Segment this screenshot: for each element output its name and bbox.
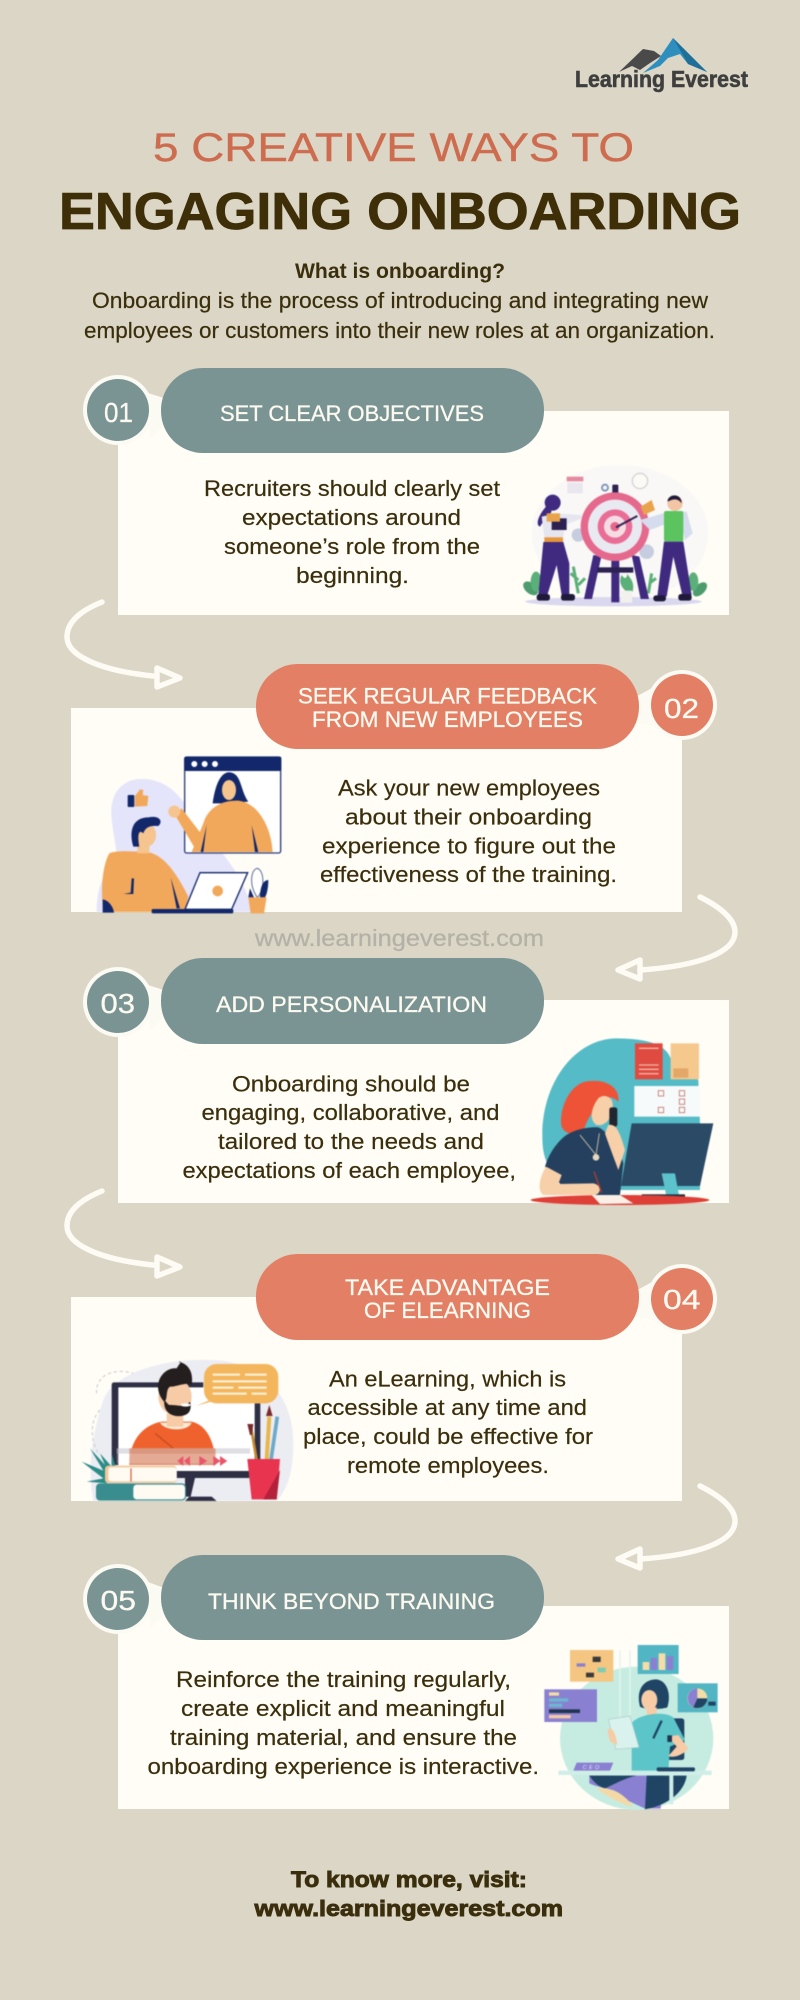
body text: Reinforce the training regularly, bbox=[176, 1667, 511, 1692]
heading pill bbox=[256, 1254, 639, 1340]
title bbox=[59, 126, 741, 241]
badge 05: 05 bbox=[100, 1585, 136, 1616]
heading pill: SET CLEAR OBJECTIVES bbox=[220, 401, 484, 426]
body text: experience to figure out the bbox=[322, 834, 616, 858]
heading pill: THINK BEYOND TRAINING bbox=[208, 1589, 495, 1614]
woman bbox=[538, 505, 552, 527]
panel: step 1 set clear objectives bbox=[83, 368, 729, 615]
heading pill: TAKE ADVANTAGE bbox=[345, 1275, 550, 1300]
intro text: what is onboarding: What is onboarding? bbox=[295, 260, 505, 283]
arrow: step 4 to step 5 bbox=[618, 1486, 735, 1568]
heading pill bbox=[161, 958, 544, 1044]
heading pill: ADD PERSONALIZATION bbox=[216, 992, 487, 1017]
footer call to action: www.learningeverest.com bbox=[253, 1896, 563, 1921]
body text: expectations of each employee, bbox=[182, 1158, 516, 1183]
body text: Ask your new employees bbox=[338, 776, 600, 800]
icon: target with two people bbox=[521, 465, 710, 606]
intro text: what is onboarding bbox=[84, 260, 715, 343]
logo: Learning Everest: Learning Everest bbox=[575, 66, 748, 92]
body text bbox=[182, 1072, 516, 1183]
badge 04: 04 bbox=[663, 1284, 700, 1315]
body text: training material, and ensure the bbox=[170, 1725, 517, 1750]
man bbox=[667, 496, 683, 511]
body text: effectiveness of the training. bbox=[320, 862, 617, 887]
body text bbox=[204, 476, 500, 588]
panel: step 5 think beyond training bbox=[83, 1555, 729, 1810]
badge 02 bbox=[630, 670, 717, 740]
heading pill bbox=[256, 664, 639, 749]
badge 01: 01 bbox=[104, 397, 133, 428]
body text: An eLearning, which is bbox=[329, 1366, 566, 1392]
arrow: step 2 to step 3 bbox=[618, 897, 735, 979]
body text: create explicit and meaningful bbox=[181, 1696, 505, 1721]
title: ENGAGING ONBOARDING bbox=[59, 183, 741, 241]
body text bbox=[303, 1366, 593, 1478]
intro text: what is onboarding: Onboarding is the process of introducing and integrating new bbox=[92, 288, 708, 313]
heading pill bbox=[161, 368, 544, 453]
body text: beginning. bbox=[296, 563, 409, 588]
body text: engaging, collaborative, and bbox=[202, 1100, 500, 1125]
heading pill: FROM NEW EMPLOYEES bbox=[312, 707, 583, 732]
watermark url: www.learningeverest.com bbox=[254, 925, 544, 951]
footer call to action bbox=[253, 1867, 563, 1921]
body text: Onboarding should be bbox=[232, 1072, 470, 1096]
title: 5 CREATIVE WAYS TO bbox=[153, 126, 634, 170]
body text bbox=[148, 1667, 539, 1779]
heading pill: OF ELEARNING bbox=[364, 1298, 531, 1323]
heading pill: SEEK REGULAR FEEDBACK bbox=[298, 684, 597, 708]
badge 03: 03 bbox=[100, 988, 135, 1019]
logo: Learning Everest bbox=[575, 38, 748, 92]
panel: step 3 add personalization bbox=[83, 958, 729, 1205]
icon: woman on phone at computer bbox=[531, 1038, 713, 1205]
panel: step 4 take advantage of elearning bbox=[71, 1254, 717, 1501]
badge 05 bbox=[83, 1564, 170, 1634]
body text: about their onboarding bbox=[345, 804, 592, 830]
panel: step 2 seek regular feedback bbox=[71, 664, 717, 913]
body text: place, could be effective for bbox=[303, 1424, 593, 1449]
body text: Recruiters should clearly set bbox=[204, 476, 500, 501]
badge 02: 02 bbox=[664, 693, 699, 724]
icon: elearning instructor on screen bbox=[82, 1360, 293, 1501]
footer call to action: To know more, visit: bbox=[291, 1867, 527, 1892]
arrow: step 3 to step 4 bbox=[67, 1191, 180, 1276]
body text: accessible at any time and bbox=[308, 1395, 587, 1420]
badge 03 bbox=[83, 967, 170, 1037]
body text: someone’s role from the bbox=[224, 534, 480, 559]
body text: expectations around bbox=[242, 505, 461, 530]
arrow: step 1 to step 2 bbox=[67, 602, 180, 687]
badge 01 bbox=[83, 375, 170, 445]
badge 04 bbox=[630, 1264, 717, 1334]
intro text: what is onboarding: employees or customers into their new roles at an organization. bbox=[84, 318, 715, 343]
icon: video call feedback bbox=[97, 757, 281, 913]
body text: onboarding experience is interactive. bbox=[148, 1754, 539, 1779]
body text: tailored to the needs and bbox=[218, 1129, 484, 1154]
icon: woman with dashboards: CEO bbox=[583, 1765, 600, 1771]
body text bbox=[320, 776, 617, 887]
icon: woman with dashboards bbox=[544, 1645, 718, 1810]
heading pill bbox=[161, 1555, 544, 1640]
body text: remote employees. bbox=[347, 1453, 549, 1478]
